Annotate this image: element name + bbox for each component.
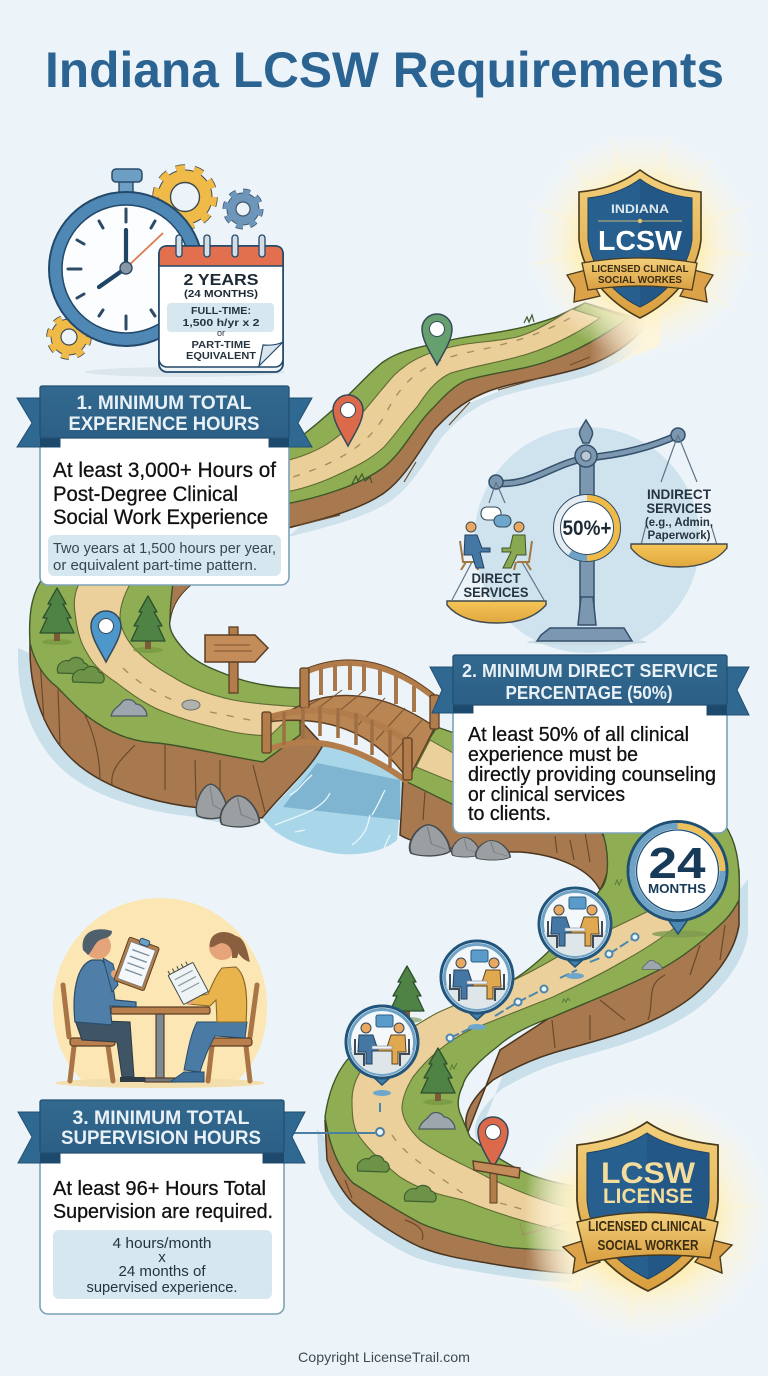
road: lower S-curve segment [317, 825, 748, 1292]
stopwatch [49, 169, 203, 346]
icon: trees on middle road [40, 588, 165, 653]
marker pin: supervision session 1 [346, 1006, 418, 1085]
icon: green location pin [422, 314, 452, 365]
sun backdrop [53, 898, 267, 1083]
icon: bushes and rock [57, 657, 147, 716]
footer copyright: Copyright LicenseTrail.com [298, 1349, 470, 1365]
detail note [48, 535, 281, 576]
calendar: (24 MONTHS) [184, 288, 258, 300]
ribbon banner: 2. MINIMUM DIRECT SERVICE [462, 660, 718, 681]
indirect services label [645, 486, 713, 542]
ribbon banner: EXPERIENCE HOURS [68, 414, 260, 435]
indirect services label: Paperwork) [648, 528, 710, 542]
calendar: EQUIVALENT [186, 350, 257, 362]
ribbon banner: PERCENTAGE (50%) [506, 682, 672, 703]
left pan [447, 601, 546, 623]
shadow [527, 639, 647, 645]
main text: Supervision are required. [53, 1200, 273, 1223]
body text: At least 50% of all clinical [468, 724, 689, 746]
ribbon banner: 1. MINIMUM TOTAL [76, 393, 252, 414]
body text: to clients. [468, 803, 551, 825]
direct services label [464, 570, 528, 600]
direct services counselling icon [460, 507, 532, 570]
chairs [63, 985, 257, 1081]
badge: LCSW license shield [563, 1122, 732, 1291]
calendar: FULL-TIME: [191, 306, 251, 317]
floor shadow [55, 1078, 265, 1088]
road: middle segment with bridge and river [18, 575, 608, 890]
ribbon banner: 3. MINIMUM TOTAL [72, 1108, 250, 1129]
body text [468, 724, 716, 825]
ribbon tails [567, 270, 713, 302]
ribbon banner: SUPERVISION HOURS [61, 1128, 261, 1149]
connector line from supervision banner to road [293, 1128, 384, 1136]
indirect services label: SERVICES [646, 500, 712, 516]
main text: Social Work Experience [53, 506, 268, 529]
notebook [166, 959, 208, 1005]
badge: Indiana LCSW shield: LICENSED CLINICAL [592, 264, 688, 275]
backdrop circle [474, 427, 700, 653]
main text: At least 96+ Hours Total [53, 1177, 266, 1200]
ribbon banner [17, 386, 312, 447]
ribbon banner [430, 655, 749, 715]
main text [53, 1177, 273, 1223]
calendar [159, 235, 283, 372]
panel: requirement 2 direct service percentage [430, 655, 749, 833]
badge: Indiana LCSW shield [567, 170, 713, 318]
icon: blue location pin [91, 611, 121, 662]
panel: requirement 1 total experience hours [17, 386, 312, 585]
detail note: Two years at 1,500 hours per year, [53, 541, 276, 557]
card body [40, 430, 289, 585]
direct services label: SERVICES [464, 584, 528, 600]
badge: LCSW license shield: LICENSED CLINICAL [588, 1218, 706, 1235]
panel: requirement 3 total supervision hours [18, 1100, 305, 1314]
marker pin: 24 months: 24 [648, 839, 706, 888]
badge: LCSW license shield: LCSW [601, 1157, 696, 1190]
marker pin: 24 months: MONTHS [648, 882, 706, 896]
main text: Post-Degree Clinical [53, 483, 238, 506]
icon: river boulders [196, 784, 510, 860]
badge: Indiana LCSW shield: LCSW [598, 225, 683, 256]
badge: Indiana LCSW shield: INDIANA [611, 202, 669, 216]
icon: lower rocks and bushes [357, 960, 662, 1202]
calendar: 2 YEARS [184, 272, 259, 289]
glow: Indiana badge [518, 125, 762, 357]
direct services label: DIRECT [472, 570, 521, 586]
main text: At least 3,000+ Hours of [53, 459, 276, 482]
blue gear [226, 192, 260, 226]
post and base [537, 420, 632, 641]
badge: Indiana LCSW shield: SOCIAL WORKES [598, 275, 682, 286]
marker pin: 24 months [628, 822, 727, 938]
icon: red location pin [333, 395, 363, 446]
center gauge: 50%+ [562, 517, 612, 540]
route line with progress markers [373, 934, 638, 1112]
calendar: 1,500 h/yr x 2 [182, 317, 260, 329]
center gauge [554, 495, 620, 561]
calendar: PART-TIME [192, 339, 250, 351]
calendar: or [217, 328, 225, 338]
detail note: supervised experience. [86, 1279, 238, 1296]
icon: lower tree pair [390, 966, 455, 1105]
detail note: or equivalent part-time pattern. [53, 558, 257, 574]
marker pin: supervision session 2 [441, 941, 513, 1020]
right pan [631, 544, 727, 567]
body text: experience must be [468, 744, 638, 766]
detail note: 4 hours/month [112, 1235, 212, 1252]
illustration: supervision meeting at table [53, 898, 267, 1088]
large yellow gear [156, 168, 214, 226]
detail note: x [158, 1249, 166, 1266]
ribbon banner [18, 1100, 305, 1163]
main text [53, 459, 276, 529]
glow: LCSW license badge [523, 1090, 768, 1340]
ribbon band [582, 258, 697, 290]
small yellow gear [50, 318, 88, 356]
card body [453, 698, 727, 833]
beam [496, 435, 678, 483]
ground shadow [85, 367, 285, 377]
badge: LCSW license shield: LICENSE [603, 1185, 693, 1208]
body text: or clinical services [468, 784, 625, 806]
detail note: 24 months of [118, 1263, 206, 1280]
clipboard [114, 934, 161, 991]
strings [452, 435, 717, 600]
detail note [53, 1230, 272, 1299]
table [111, 1007, 210, 1082]
icon: red pin with signpost [473, 1117, 520, 1203]
road: upper segment to Indiana badge [280, 300, 660, 537]
ribbon tails [563, 1240, 732, 1273]
body text: directly providing counseling [468, 764, 716, 786]
icon: wooden arrow signpost [205, 627, 268, 693]
card body [40, 1145, 284, 1314]
ribbon band [577, 1212, 718, 1263]
badge: LCSW license shield: SOCIAL WORKER [598, 1237, 699, 1254]
indirect services label: INDIRECT [647, 486, 711, 502]
man supervisor [74, 929, 145, 1082]
indirect services label: (e.g., Admin, [645, 515, 713, 529]
icon: wooden bridge [262, 660, 439, 782]
title: Indiana LCSW Requirements [45, 42, 724, 98]
illustration: balance scale 50 percent [447, 420, 727, 653]
marker pin: supervision session 3 [539, 888, 611, 967]
illustration: stopwatch, gears and calendar [49, 168, 285, 377]
woman supervisee [170, 932, 250, 1082]
